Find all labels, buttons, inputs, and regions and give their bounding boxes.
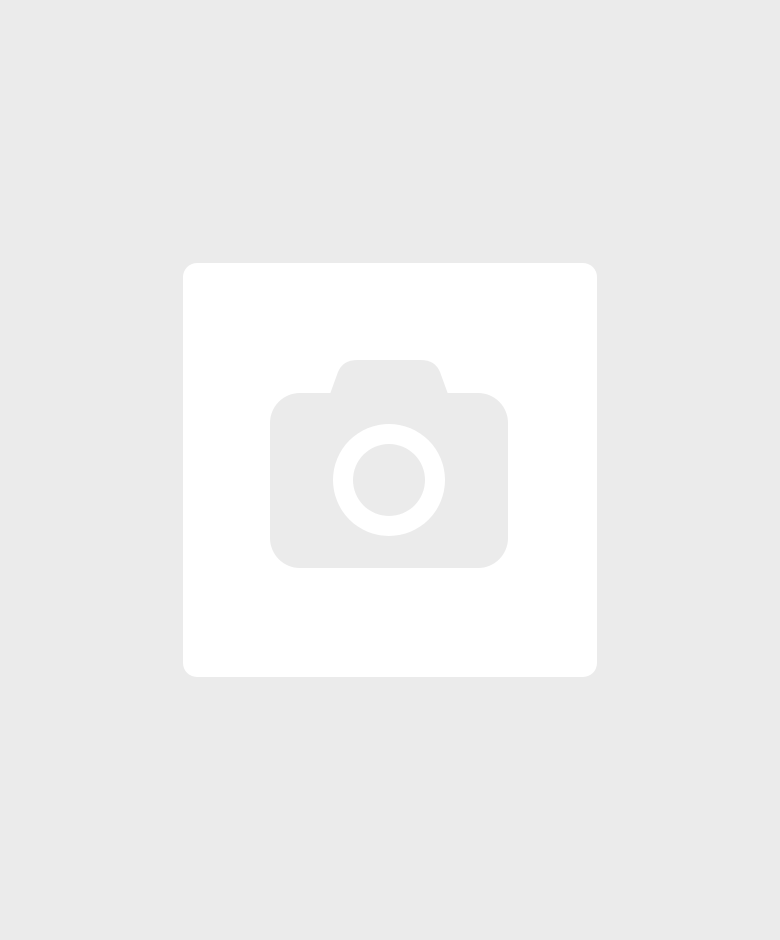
panel: white rounded square <box>183 263 597 677</box>
icon: camera <box>270 360 508 568</box>
